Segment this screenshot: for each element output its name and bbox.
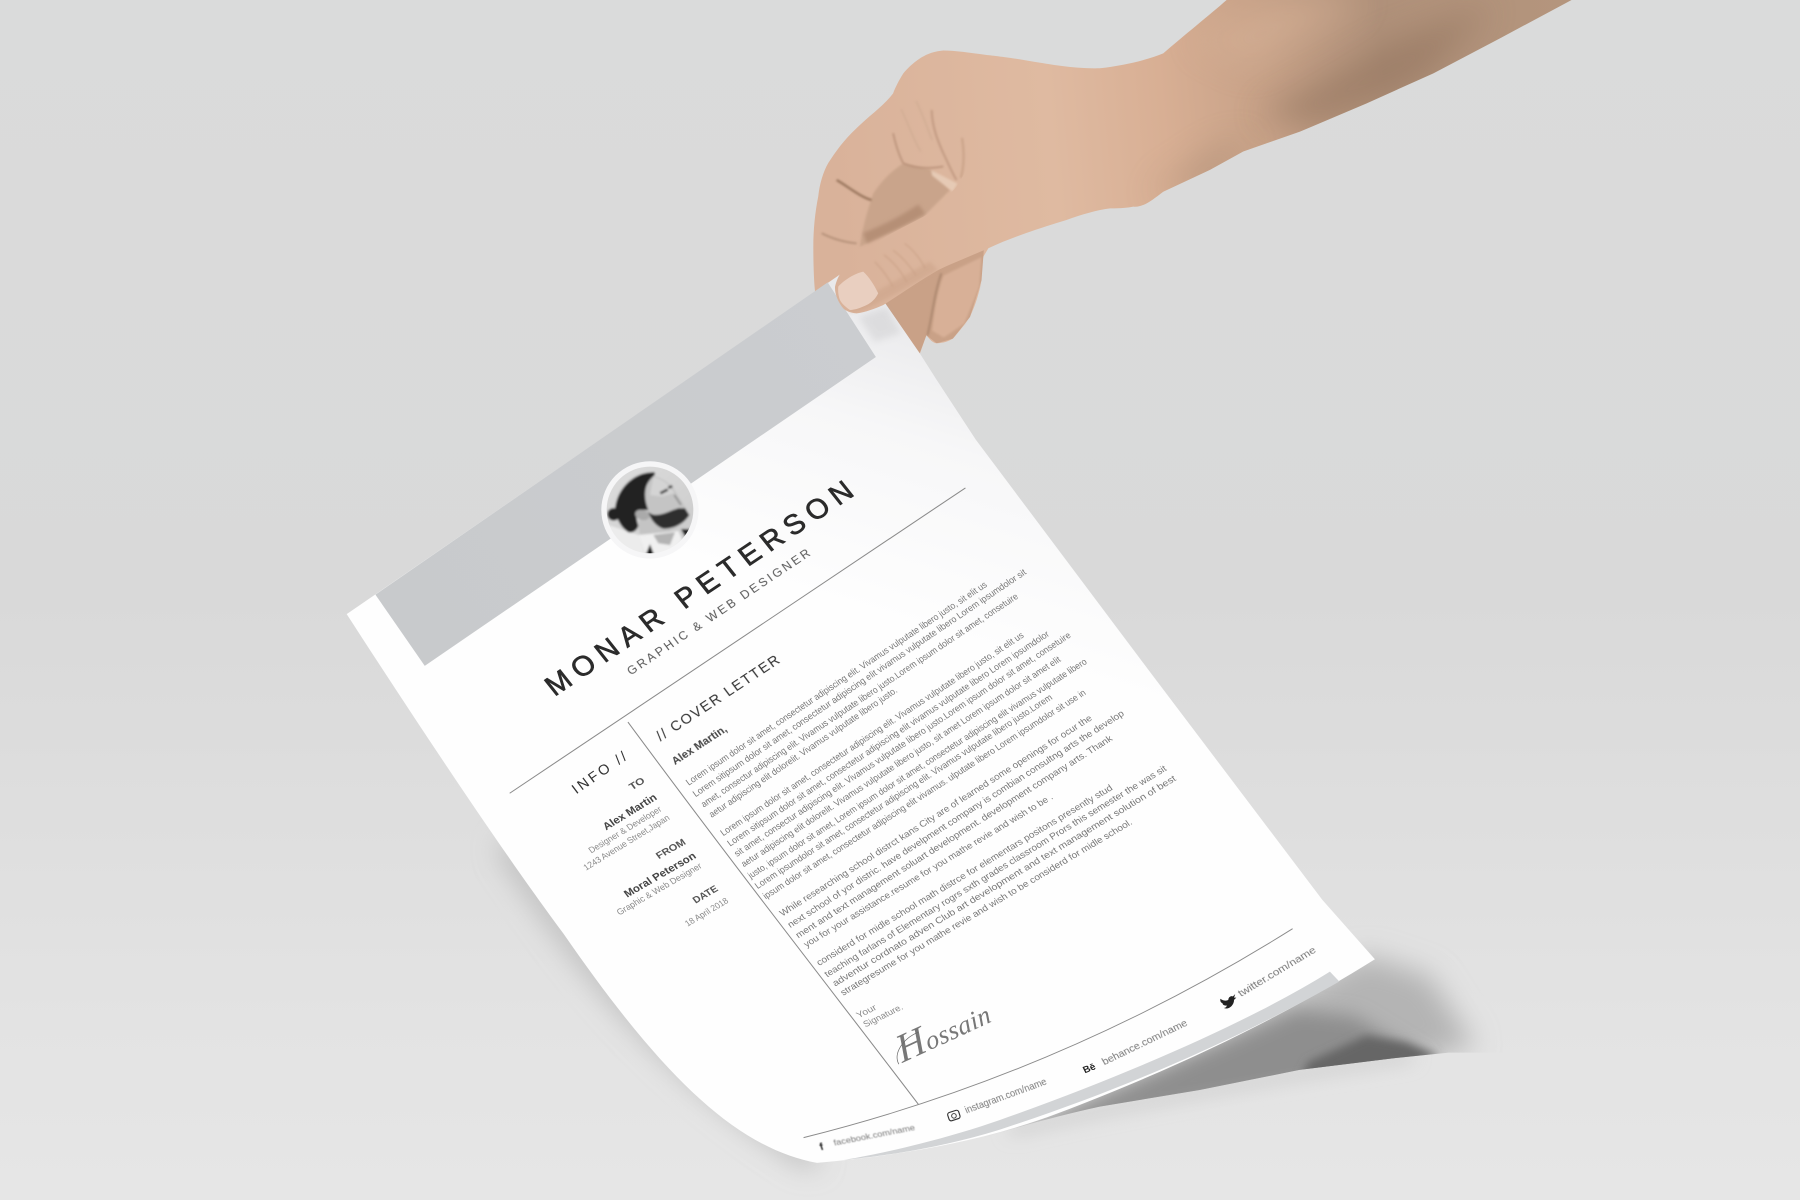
thumb underside shading: [849, 262, 938, 312]
name heading: MONAR PETERSON: [539, 475, 860, 702]
little finger highlight: [932, 257, 982, 338]
letter paragraph 4: considerd for midle school math distrce for elementars positons presently stud: [814, 783, 1114, 968]
salutation: Alex Martin,: [670, 723, 730, 768]
letter paragraph 3: next school of yor distric. have develpment company is combian consultng arts the develop: [786, 708, 1126, 930]
thumb shadow on paper: [859, 308, 901, 342]
thumb over paper: [835, 163, 1010, 313]
letter paragraph 3: ment and text management soluart development. development company arts. Thank: [794, 733, 1115, 940]
letter paragraph 2: sit amet, consectur adipiscing elit. Vivamus vulputate libero justo.Lorem ipsum dolor sit amet, consetuire: [732, 630, 1073, 859]
back fingers shading: [885, 250, 984, 354]
signature block: [854, 988, 996, 1072]
footer: facebook: facebook.com/name: [832, 1123, 917, 1148]
column divider: [628, 722, 918, 1104]
finger crease shadows: [822, 101, 964, 243]
curled finger tip: [931, 170, 957, 192]
portrait photo: [606, 466, 694, 554]
letter paragraph 1: Lorem ipsum dolor sit amet, consectetur adipiscing elit. Vivamus vulputate libero justo, sit elit us: [684, 579, 989, 787]
signature block: Hossain: [889, 988, 996, 1072]
header band: [375, 282, 876, 666]
thumbnail: [838, 272, 878, 310]
from block: Moral Peterson: [622, 850, 699, 900]
finger gap: [928, 273, 941, 335]
letter paragraph 2: ipsum dolor sit amet, consectetur adipiscing elit vivamus. ulputate libero Lorem ipsumdolor sit use in: [761, 688, 1088, 901]
to block: [581, 776, 672, 872]
cast shadows: [505, 844, 1475, 1162]
from block: FROM: [654, 837, 688, 862]
letter paragraph 3: you for your assistance.resume for you mathe revie and wish to be .: [802, 792, 1055, 949]
letter paragraph 3: While researching school distrct kans City are of learned some openings for ocur the: [778, 713, 1094, 918]
paper sheet: [347, 264, 1375, 1163]
signature block: Signature.: [861, 1002, 905, 1029]
portrait: [601, 461, 694, 554]
letter paragraph 1: Lorem sitipsum dolor sit amet, consectetur adipiscing elit vivamus vulputate libero Lorem ipsumdolor sit: [691, 567, 1028, 799]
letter paragraph 4: adventur cordnato adven Club art development and text management solution of best: [830, 773, 1178, 988]
to block: TO: [627, 776, 648, 793]
signature block: Your: [854, 1002, 878, 1020]
knuckle wrinkles: [875, 243, 925, 287]
footer: instagram: instagram.com/name: [963, 1077, 1049, 1116]
from block: Graphic & Web Designer: [615, 861, 704, 917]
to block: Alex Martin: [601, 792, 660, 833]
pocket between fingers and thumb: [860, 163, 950, 247]
footer: behance: behance.com/name: [1100, 1018, 1190, 1068]
letter paragraph 1: amet, consectur adipiscing elit. Vivamus vulputate libero justo.Lorem ipsum dolor sit amet, consetuire: [699, 591, 1020, 809]
footer: twitter: [1220, 945, 1319, 1009]
footer: behance: [1081, 1018, 1190, 1076]
resume paper: [347, 264, 1375, 1163]
footer: twitter: twitter.com/name: [1236, 945, 1319, 999]
arm shading: [1171, 8, 1466, 187]
letter paragraph 4: strategresume for you mathe revie and wish to be considerd for midle school.: [839, 817, 1134, 997]
cover letter heading: // COVER LETTER: [653, 653, 783, 745]
letter paragraph 2: Lorem sitipsum dolor sit amet, consectetur adipiscing elit vivamus vulputate libero Lorem ipsumdolor: [725, 629, 1051, 848]
to block: Designer & Developer: [586, 804, 664, 855]
footer band: [844, 972, 1339, 1160]
info heading: INFO //: [569, 749, 630, 798]
letter paragraph 2: Lorem ipsumdolor sit amet, consectetur adipiscing elit. Vivamus vulputate libero justo.Lorem: [753, 692, 1054, 891]
header rule: [510, 488, 965, 793]
date block: 18 April 2018: [683, 896, 730, 928]
footer: facebook: [818, 1123, 917, 1153]
footer: behance: Bē: [1081, 1062, 1098, 1076]
letter paragraph 2: aetur adipiscing elit dolorelit. Vivamus vulputate libero justo, sit amet Lorem ipsum dolor sit amet elit: [739, 654, 1063, 869]
to block: 1243 Avenue Street,Japan: [581, 813, 672, 872]
date block: DATE: [691, 884, 721, 906]
letter paragraph 4: teaching farlans of Elementary rogrs sxth grades classroom Prors this semester the was sit: [822, 763, 1169, 979]
portrait ring: [601, 461, 699, 559]
letter paragraph 2: Lorem ipsum dolor sit amet, consectetur adipiscing elit. Vivamus vulputate libero justo, sit elit us: [718, 630, 1026, 838]
footer: facebook: f: [818, 1142, 826, 1153]
letter paragraph 2: justo, ipsum dolor sit amet, Lorem ipsum dolor sit amet, consectetur adipiscing elit vivamus vulputate libero: [745, 657, 1089, 881]
footer rule: [804, 929, 1293, 1138]
info column: [569, 749, 730, 928]
arm and back fingers: [813, 0, 1572, 354]
footer: instagram: [947, 1077, 1049, 1121]
letter paragraph 1: aetur adipiscing elit dolorelit. Vivamus vulputate libero justo.: [707, 685, 899, 820]
pocket inner shadow: [863, 204, 925, 243]
job title: GRAPHIC & WEB DESIGNER: [624, 546, 813, 678]
